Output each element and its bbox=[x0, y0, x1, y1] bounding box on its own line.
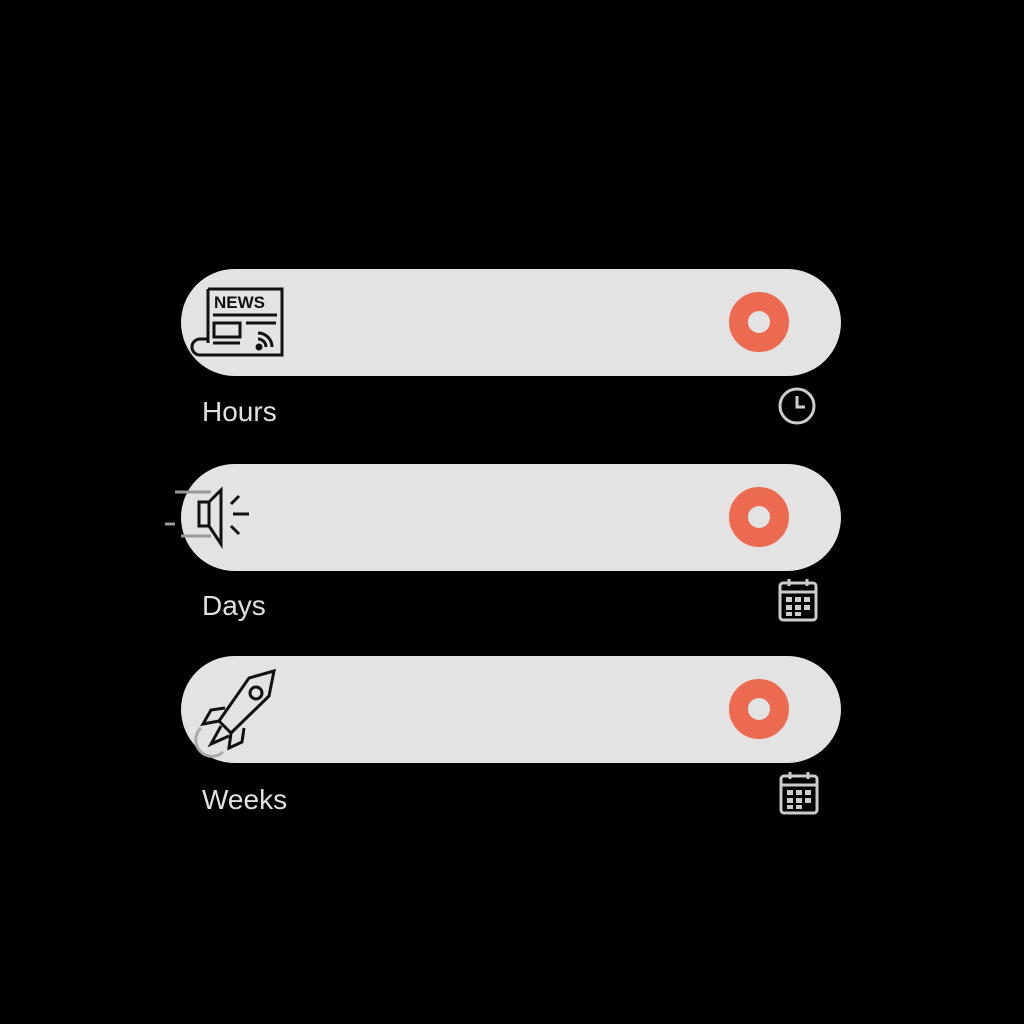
icon: rocket bbox=[194, 668, 276, 758]
bar: days bbox=[181, 464, 841, 571]
orange marker bbox=[729, 292, 789, 352]
bar: weeks bbox=[181, 656, 841, 763]
bar: hours bbox=[181, 269, 841, 376]
orange marker bbox=[729, 487, 789, 547]
icon: clock bbox=[778, 388, 816, 424]
icon: newspaper: NEWS bbox=[214, 293, 265, 312]
orange marker bbox=[729, 679, 789, 739]
icon: calendar bbox=[780, 772, 818, 814]
label: Weeks: Weeks bbox=[202, 784, 287, 815]
label: Hours: Hours bbox=[202, 396, 277, 427]
icon: megaphone bbox=[165, 486, 249, 549]
label: Days: Days bbox=[202, 590, 266, 621]
icon: newspaper bbox=[190, 288, 284, 356]
icon: calendar bbox=[778, 579, 818, 622]
